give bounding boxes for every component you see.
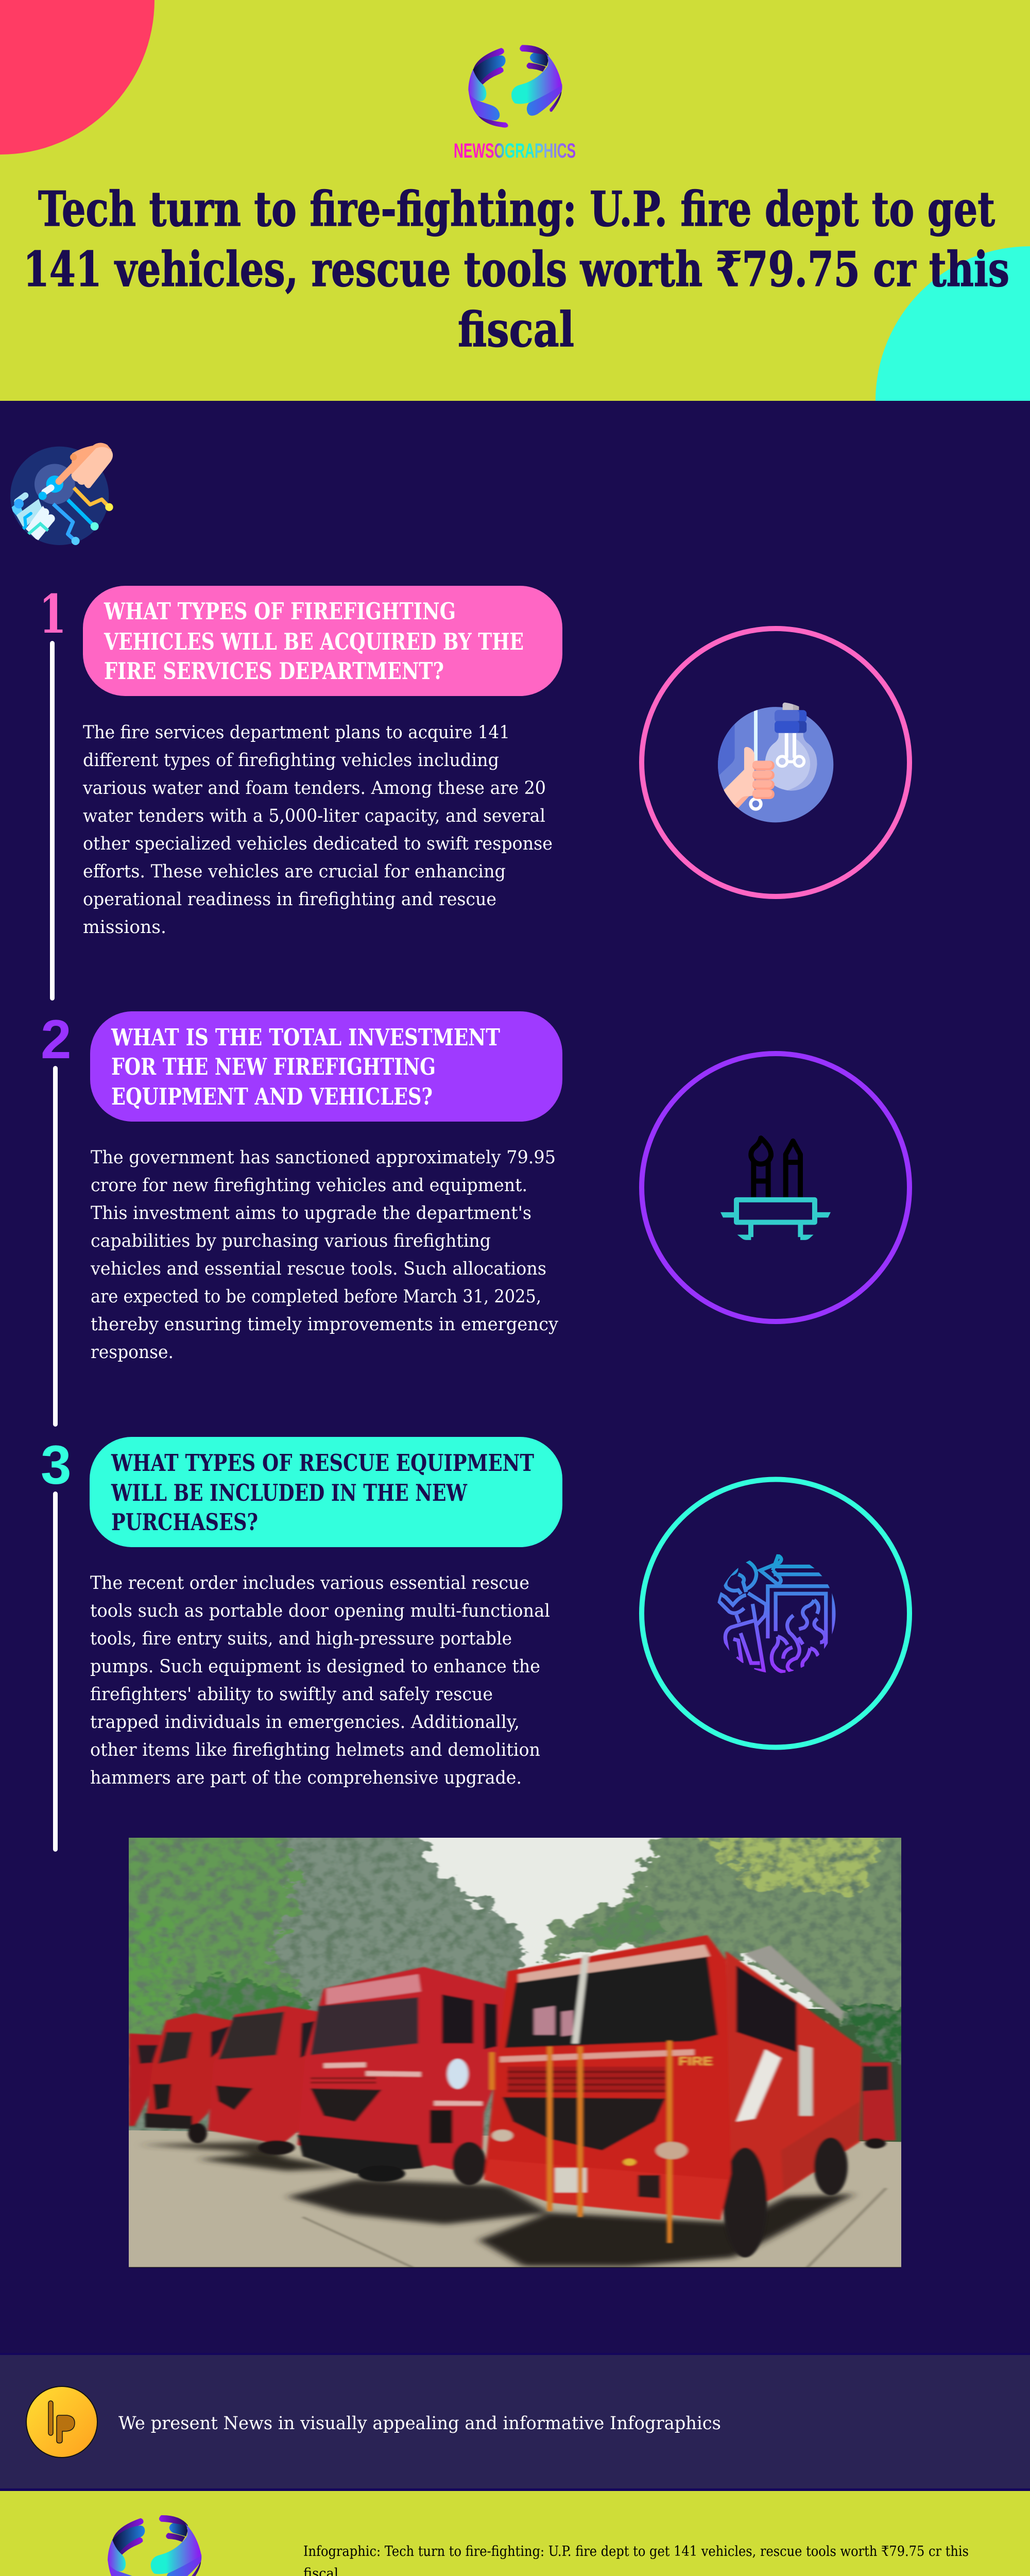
icon: paint brush and pencil on holder xyxy=(720,1138,831,1240)
footer caption: Infographic: Tech turn to fire-fighting: U.P. fire dept to get 141 vehicles, rescue tools worth ₹79.75 cr this xyxy=(303,2544,969,2560)
ground xyxy=(129,2130,901,2267)
title: fiscal xyxy=(458,301,574,358)
icon: hand pulling light bulb cord xyxy=(713,703,833,822)
heading pill: FIRE SERVICES DEPARTMENT? xyxy=(104,657,444,685)
decorative teal corner xyxy=(876,246,1030,401)
body text: other specialized vehicles dedicated to swift response xyxy=(83,834,553,854)
body text: operational readiness in firefighting and rescue xyxy=(83,889,496,910)
ring 3 xyxy=(642,1480,909,1748)
footer panel xyxy=(0,2491,1030,2576)
heading pill: FOR THE NEW FIREFIGHTING xyxy=(111,1053,436,1080)
logo mark xyxy=(468,45,562,128)
connector line xyxy=(53,1066,58,1427)
body text: trapped individuals in emergencies. Additionally, xyxy=(90,1712,520,1733)
connector line xyxy=(50,641,55,1001)
body text: firefighters' ability to swiftly and safely rescue xyxy=(90,1684,493,1705)
body text: This investment aims to upgrade the department's xyxy=(91,1203,531,1224)
tagline text: We present News in visually appealing and informative Infographics xyxy=(118,2413,721,2434)
heading pill: EQUIPMENT AND VEHICLES? xyxy=(111,1083,433,1110)
heading pill: VEHICLES WILL BE ACQUIRED BY THE xyxy=(104,628,524,655)
ring 1 xyxy=(642,629,909,896)
footer caption xyxy=(303,2544,969,2576)
panel: section 1 xyxy=(39,583,909,1001)
body text: other items like firefighting helmets and demolition xyxy=(90,1740,540,1760)
heading pill xyxy=(90,1437,562,1547)
body text: thereby ensuring timely improvements in emergency xyxy=(91,1314,558,1335)
body text: efforts. These vehicles are crucial for enhancing xyxy=(83,861,506,882)
ring 2 xyxy=(642,1054,909,1321)
panel: section 2 xyxy=(41,1008,909,1427)
body text: The fire services department plans to acquire 141 xyxy=(83,722,510,743)
heading pill: WHAT IS THE TOTAL INVESTMENT xyxy=(111,1024,500,1051)
body text: vehicles and essential rescue tools. Such allocations xyxy=(90,1259,546,1279)
panel: section 3 xyxy=(41,1434,909,1852)
number 1: 1 xyxy=(39,583,66,646)
body text: pumps. Such equipment is designed to enhance the xyxy=(90,1656,540,1677)
body text: The recent order includes various essential rescue xyxy=(90,1573,529,1594)
connector line xyxy=(53,1492,58,1852)
logo wordmark: NEWSOGRAPHICS xyxy=(454,140,576,162)
title xyxy=(23,181,1009,358)
body text: hammers are part of the comprehensive upgrade. xyxy=(90,1768,522,1788)
heading pill xyxy=(90,1011,562,1122)
body text: water tenders with a 5,000-liter capacity, and several xyxy=(83,806,545,826)
decorative pink corner xyxy=(0,0,154,155)
body text: crore for new firefighting vehicles and equipment. xyxy=(91,1175,527,1196)
number 2: 2 xyxy=(41,1008,72,1070)
ground shadows xyxy=(140,2142,854,2266)
body text: response. xyxy=(91,1342,174,1363)
body text xyxy=(90,1147,558,1363)
body text: missions. xyxy=(83,917,166,938)
body text: different types of firefighting vehicles including xyxy=(83,750,499,771)
body text xyxy=(82,722,553,938)
engines: FIRE xyxy=(678,2055,713,2068)
heading pill xyxy=(83,586,562,696)
icon: human and robot hand touching xyxy=(10,443,113,545)
body text: are expected to be completed before March 31, 2025, xyxy=(91,1286,541,1307)
icon: firefighter at burning door xyxy=(718,1555,834,1672)
heading pill: WHAT TYPES OF RESCUE EQUIPMENT xyxy=(111,1449,534,1477)
tagline band xyxy=(0,2353,1030,2491)
header panel xyxy=(0,0,1030,401)
backdrop behind engines xyxy=(805,2009,901,2142)
body text: capabilities by purchasing various firefighting xyxy=(91,1231,491,1251)
tree canopy xyxy=(129,1838,901,2136)
photo: row of red fire engines xyxy=(129,1838,901,2268)
icon: LP coin xyxy=(26,2386,97,2458)
heading pill: PURCHASES? xyxy=(111,1509,258,1536)
engines xyxy=(129,1935,896,2267)
body text: The government has sanctioned approximately 79.95 xyxy=(91,1147,556,1168)
number 3: 3 xyxy=(41,1434,72,1496)
body text: various water and foam tenders. Among these are 20 xyxy=(82,778,546,799)
heading pill: WHAT TYPES OF FIREFIGHTING xyxy=(104,598,456,625)
heading pill: WILL BE INCLUDED IN THE NEW xyxy=(111,1479,468,1506)
body text: tools, fire entry suits, and high-pressure portable xyxy=(90,1629,512,1649)
footer logo mark xyxy=(108,2515,201,2576)
body text xyxy=(90,1573,550,1788)
body text: tools such as portable door opening multi-functional xyxy=(90,1601,550,1621)
